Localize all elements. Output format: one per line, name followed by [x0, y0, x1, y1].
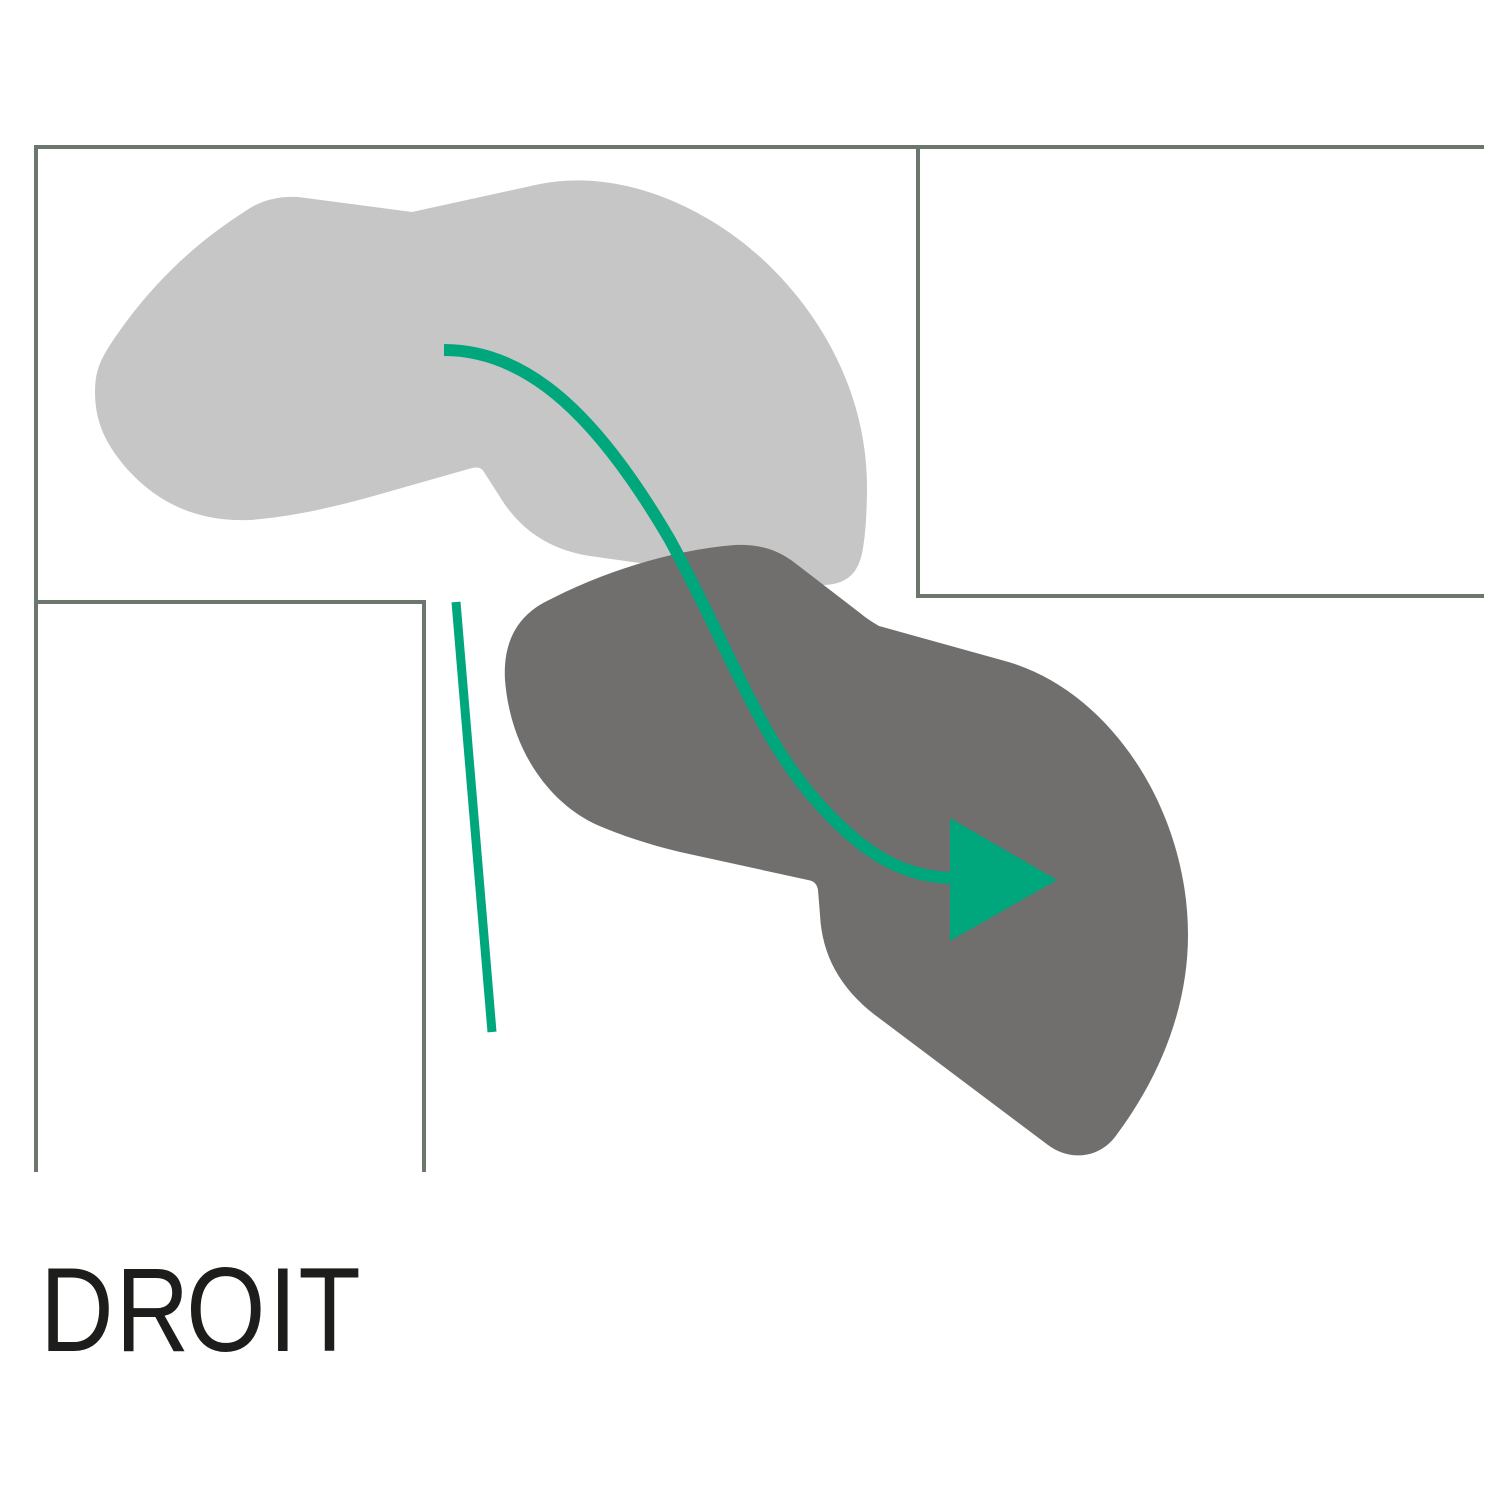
arrow: movement path: [444, 350, 1057, 941]
shape: end position dark grey: [505, 545, 1188, 1155]
wall outlines: [36, 147, 1484, 1172]
green line: door: [456, 602, 492, 1032]
shape: start position light grey: [95, 180, 867, 585]
label: DROIT: [40, 1242, 361, 1377]
